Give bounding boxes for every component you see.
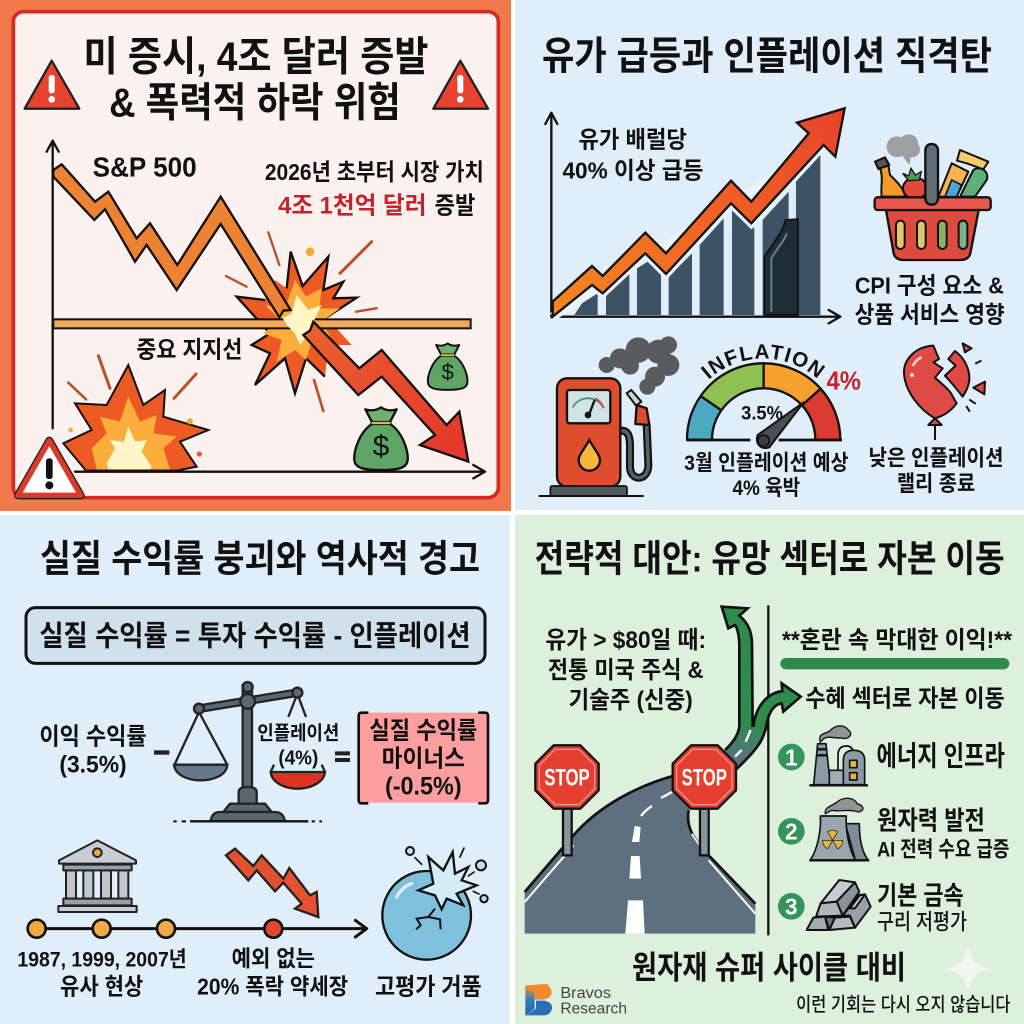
text: CPI impact (855, 272, 1005, 328)
text: bear market: 예외 없는 (232, 945, 315, 971)
title: real yield: 실질 수익률 붕괴와 역사적 경고 (40, 537, 480, 579)
icon: warning corner (18, 441, 81, 495)
icon: scale (173, 682, 325, 821)
icon: stop sign left: STOP (544, 764, 590, 791)
S&P 500 line (53, 164, 291, 317)
icon: money bag small (428, 343, 467, 390)
gauge: inflation: 4% (826, 365, 861, 395)
red zigzag arrow (226, 849, 318, 917)
text: base metals: 구리 저평가 (877, 909, 967, 934)
text: oil above 80: 전통 미국 주식 & (548, 657, 703, 684)
title: market warning: & 폭력적 하락 위험 (109, 80, 401, 126)
callout: market value: 2026년 초부터 시장 가치 (265, 159, 484, 185)
text: nominal yield: (3.5%) (59, 752, 127, 779)
text: nominal yield (39, 723, 147, 779)
chart label: oil price (562, 126, 703, 183)
icon: broken balloon (904, 343, 985, 440)
text: inflation forecast: 4% 육박 (732, 476, 800, 500)
text: inflation rate: 인플레이션 (257, 723, 339, 745)
icon: stop sign left (535, 745, 599, 855)
text: oil above 80 (545, 627, 706, 714)
item 2: nuclear power (778, 798, 869, 860)
arrow: right (753, 683, 801, 729)
text: base metals: 기본 금속 (877, 881, 964, 911)
text: nuclear power: 원자력 발전 (877, 805, 985, 835)
timeline (28, 920, 367, 938)
explosion: impact (226, 232, 377, 411)
item 3: base metals: 3 (785, 894, 798, 920)
support label: 중요 지지선 (136, 336, 242, 362)
callout: market value: 4조 1천억 달러 (278, 192, 426, 219)
icon: stop sign right: STOP (682, 764, 727, 791)
icon: temple (58, 840, 137, 912)
gauge: inflation: 3.5% (741, 403, 783, 424)
text: profit headline: **혼란 속 막대한 이익!** (782, 627, 1013, 654)
text: bear market (197, 945, 348, 1000)
arrow: up (722, 607, 753, 729)
result box: 실질 수익률 (369, 718, 477, 745)
item 1: energy infrastructure (778, 726, 868, 785)
text: nominal yield: 이익 수익률 (39, 723, 147, 750)
icon: stop sign right (673, 745, 736, 855)
icon: money bag large: $ (373, 430, 390, 463)
gauge: inflation (686, 344, 861, 450)
gauge: inflation: INFLATION (700, 344, 826, 379)
panel: real yield (0, 515, 510, 1024)
text: oil above 80: 기술주 (신중) (569, 687, 693, 714)
logo: Bravos Research: Bravos (560, 985, 611, 1002)
crash arrow (303, 322, 468, 462)
chart axes (545, 113, 840, 323)
bar chart: oil price (574, 155, 820, 315)
minus sign (154, 750, 169, 755)
title: market warning: 미 증시, 4조 달러 증발 (83, 34, 428, 80)
text: inflation rate: (4%) (278, 747, 318, 770)
panel: oil and inflation (515, 0, 1024, 510)
sparkle (944, 945, 992, 993)
result box: (-0.5%) (385, 773, 462, 801)
text: nuclear power (877, 805, 1009, 861)
item 2: nuclear power: 2 (785, 819, 798, 845)
icon: money bag large (354, 407, 408, 470)
text: inflation rate (257, 723, 339, 770)
logo: Bravos Research (525, 984, 627, 1018)
text: CPI impact: CPI 구성 요소 & (855, 272, 1004, 298)
chart label: S&P 500: S&P 500 (93, 152, 197, 183)
panel: market warning (0, 0, 511, 511)
green divider bar (780, 658, 1009, 669)
text: past years: 유사 현상 (60, 974, 143, 1000)
text: overvalued bubble: 고평가 거품 (375, 974, 482, 1000)
panel: strategic alternatives (515, 515, 1024, 1024)
road (525, 727, 766, 934)
divider (765, 605, 772, 935)
chart label: oil price: 유가 배럴당 (578, 126, 687, 152)
chart axes (47, 141, 485, 478)
text: capital shift: 수혜 섹터로 자본 이동 (805, 686, 1005, 713)
rising arrow (553, 108, 845, 317)
icon: bubble (382, 847, 488, 960)
subtitle: commodity cycle: 원자재 슈퍼 사이클 대비 (632, 950, 906, 986)
formula box: 실질 수익률 = 투자 수익률 - 인플레이션 (39, 620, 471, 652)
icon: money bag small: $ (441, 360, 454, 385)
formula box (26, 608, 485, 663)
icon: warning left (25, 61, 79, 109)
text: inflation forecast: 3월 인플레이션 예상 (684, 451, 849, 475)
text: rally ends: 낮은 인플레이션 (868, 446, 1003, 471)
title: market warning (83, 34, 428, 126)
explosion center (283, 295, 322, 345)
item 3: base metals (778, 880, 871, 930)
text: base metals (877, 881, 967, 934)
explosion: ground (63, 356, 208, 471)
icon: warning right (433, 61, 488, 109)
text: rally ends (868, 446, 1003, 496)
callout: market value (265, 159, 484, 219)
text: oil above 80: 유가 > $80일 때: (545, 627, 706, 654)
chart label: oil price: 40% 이상 급등 (562, 157, 703, 183)
text: CPI impact: 상품 서비스 영향 (855, 302, 1005, 328)
icon: grocery basket (875, 134, 991, 260)
text: past years: 1987, 1999, 2007년 (17, 947, 187, 971)
result box (359, 713, 488, 803)
support line (53, 319, 471, 328)
text: bear market: 20% 폭락 약세장 (197, 974, 348, 1000)
text: past years (17, 947, 187, 1000)
logo: Bravos Research: Research (560, 1001, 627, 1018)
text: inflation forecast (684, 451, 849, 500)
text: rally ends: 랠리 종료 (897, 471, 975, 496)
icon: fuel pump (539, 336, 679, 496)
callout: market value: 증발 (435, 192, 475, 219)
equals sign (335, 753, 350, 760)
result box: 마이너스 (382, 745, 465, 772)
item 1: energy infrastructure: 1 (785, 744, 798, 770)
